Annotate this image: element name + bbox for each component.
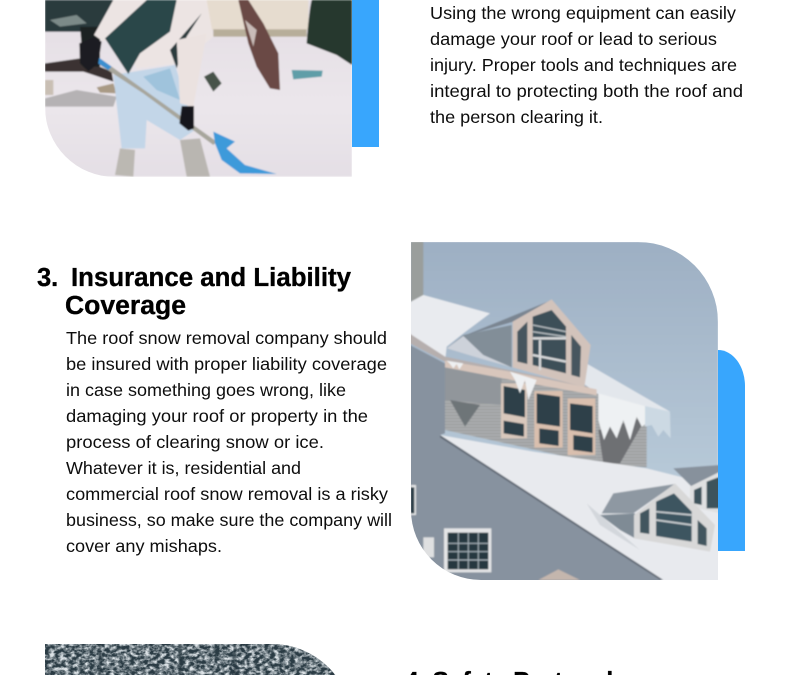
text block: equipment description: the person clearing it. [430, 107, 603, 127]
heading: insurance and liability coverage: Coverage [65, 292, 186, 320]
text block: insurance description: Whatever it is, residential and [66, 458, 301, 478]
photo: person shoveling snow [45, 0, 352, 177]
text block: equipment description: injury. Proper tools and techniques are [430, 55, 737, 75]
text block: equipment description: damage your roof or lead to serious [430, 29, 717, 49]
text block: equipment description: Using the wrong equipment can easily [430, 3, 736, 23]
text block: insurance description [66, 328, 392, 556]
text block: insurance description: business, so make sure the company will [66, 510, 392, 530]
accent block: blue bar beside shoveling photo [352, 0, 379, 147]
text block: insurance description: commercial roof snow removal is a risky [66, 484, 388, 504]
text block: equipment description: integral to protecting both the roof and [430, 81, 743, 101]
text block: insurance description: process of clearing snow or ice. [66, 432, 324, 452]
text block: insurance description: damaging your roof or property in the [66, 406, 368, 426]
photo: snow-covered house with icicles [407, 242, 720, 583]
text block: insurance description: The roof snow removal company should [66, 328, 387, 348]
text block: equipment description [430, 3, 743, 127]
heading: insurance and liability coverage: 3. [37, 264, 58, 292]
photo: frosted trees [45, 644, 352, 675]
accent block: blue shape beside house photo [718, 350, 745, 551]
heading: insurance and liability coverage: Insurance and Liability [71, 264, 352, 292]
text block: insurance description: be insured with proper liability coverage [66, 354, 387, 374]
heading: insurance and liability coverage [37, 264, 352, 320]
text block: insurance description: in case something goes wrong, like [66, 380, 346, 400]
text block: insurance description: cover any mishaps. [66, 536, 222, 556]
